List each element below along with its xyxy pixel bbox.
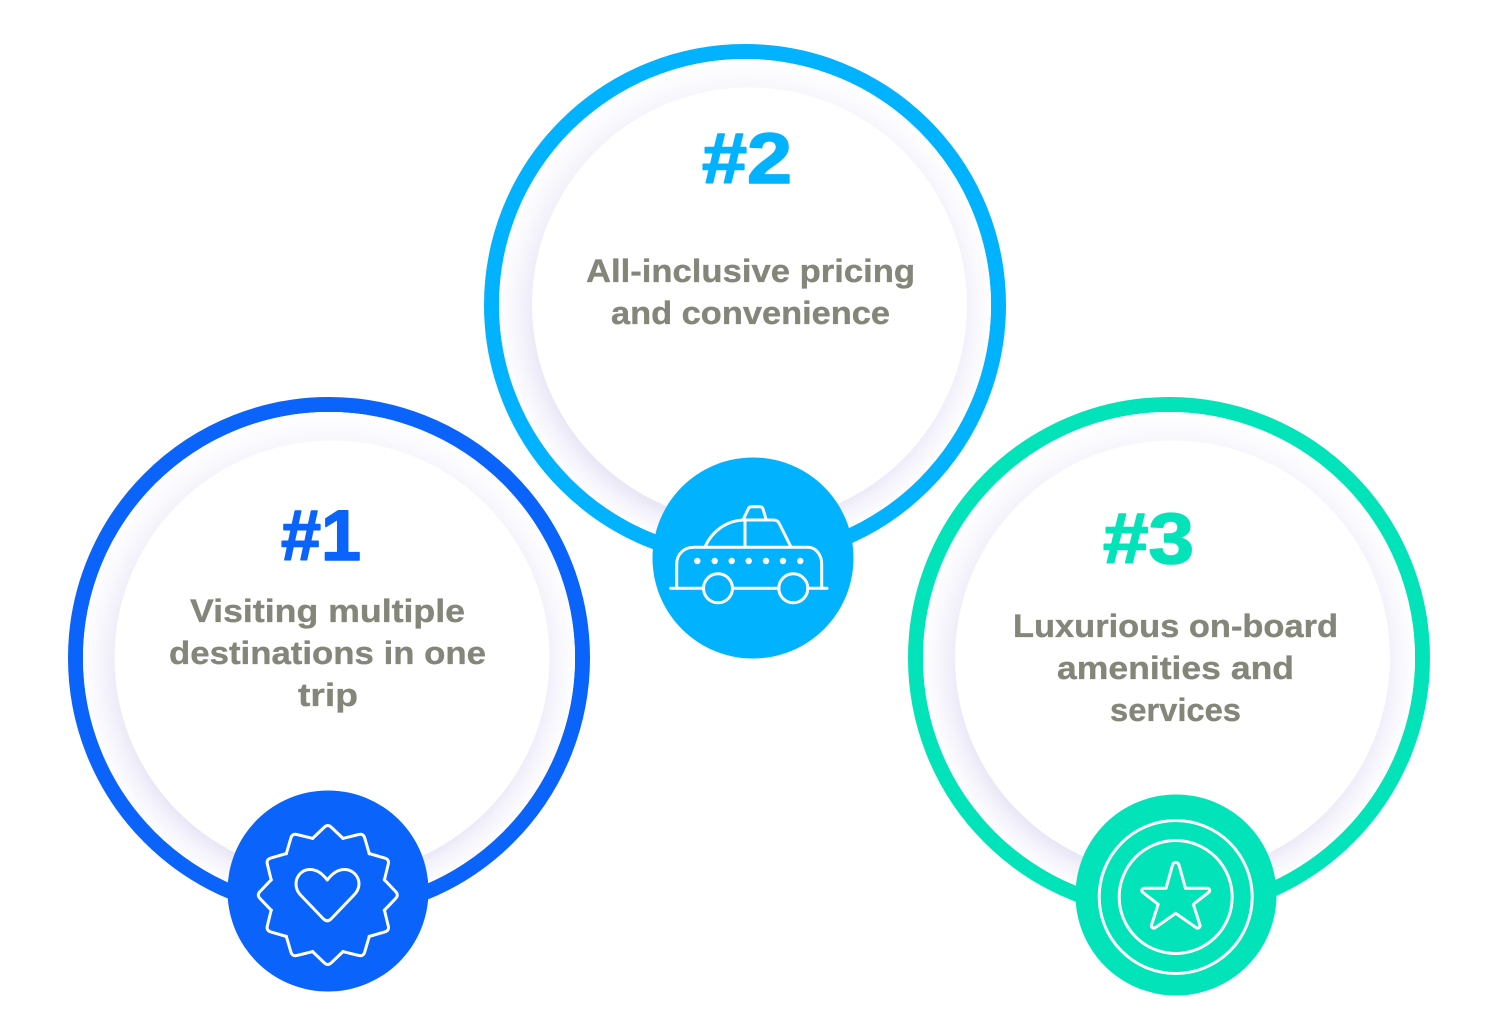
text: reason 2: and convenience bbox=[611, 295, 890, 331]
text: reason 2 bbox=[586, 253, 915, 331]
icon: taxi bbox=[671, 507, 827, 603]
text: reason 3: Luxurious on-board bbox=[1013, 608, 1338, 644]
badge: star medal bbox=[1076, 794, 1276, 996]
text: reason 1: Visiting multiple bbox=[190, 593, 465, 629]
number: #3: #3 bbox=[1103, 500, 1194, 579]
number: #1: #1 bbox=[281, 497, 361, 576]
icon: medal circles bbox=[1099, 820, 1252, 974]
text: reason 1: trip bbox=[298, 677, 358, 713]
icon: taxi dots bbox=[694, 558, 804, 564]
panel: reason 2 bbox=[492, 52, 998, 658]
text: reason 3 bbox=[1013, 608, 1338, 728]
number: #2: #2 bbox=[702, 120, 792, 199]
ring: reason 1 bbox=[76, 404, 582, 912]
text: reason 1 bbox=[169, 593, 486, 713]
badge: taxi bbox=[652, 458, 854, 658]
ring: reason 3 bbox=[916, 404, 1422, 912]
icon: star bbox=[1142, 862, 1210, 928]
panel: reason 3 bbox=[916, 404, 1422, 996]
panel: reason 1 bbox=[76, 404, 582, 992]
ring: reason 2 bbox=[492, 52, 998, 558]
text: reason 3: services bbox=[1110, 692, 1241, 728]
text: reason 1: destinations in one bbox=[169, 635, 486, 671]
text: reason 3: amenities and bbox=[1057, 650, 1294, 686]
text: reason 2: All-inclusive pricing bbox=[586, 253, 915, 289]
badge: heart seal bbox=[228, 790, 428, 992]
icon: seal bbox=[258, 826, 397, 964]
icon: heart bbox=[296, 870, 359, 921]
